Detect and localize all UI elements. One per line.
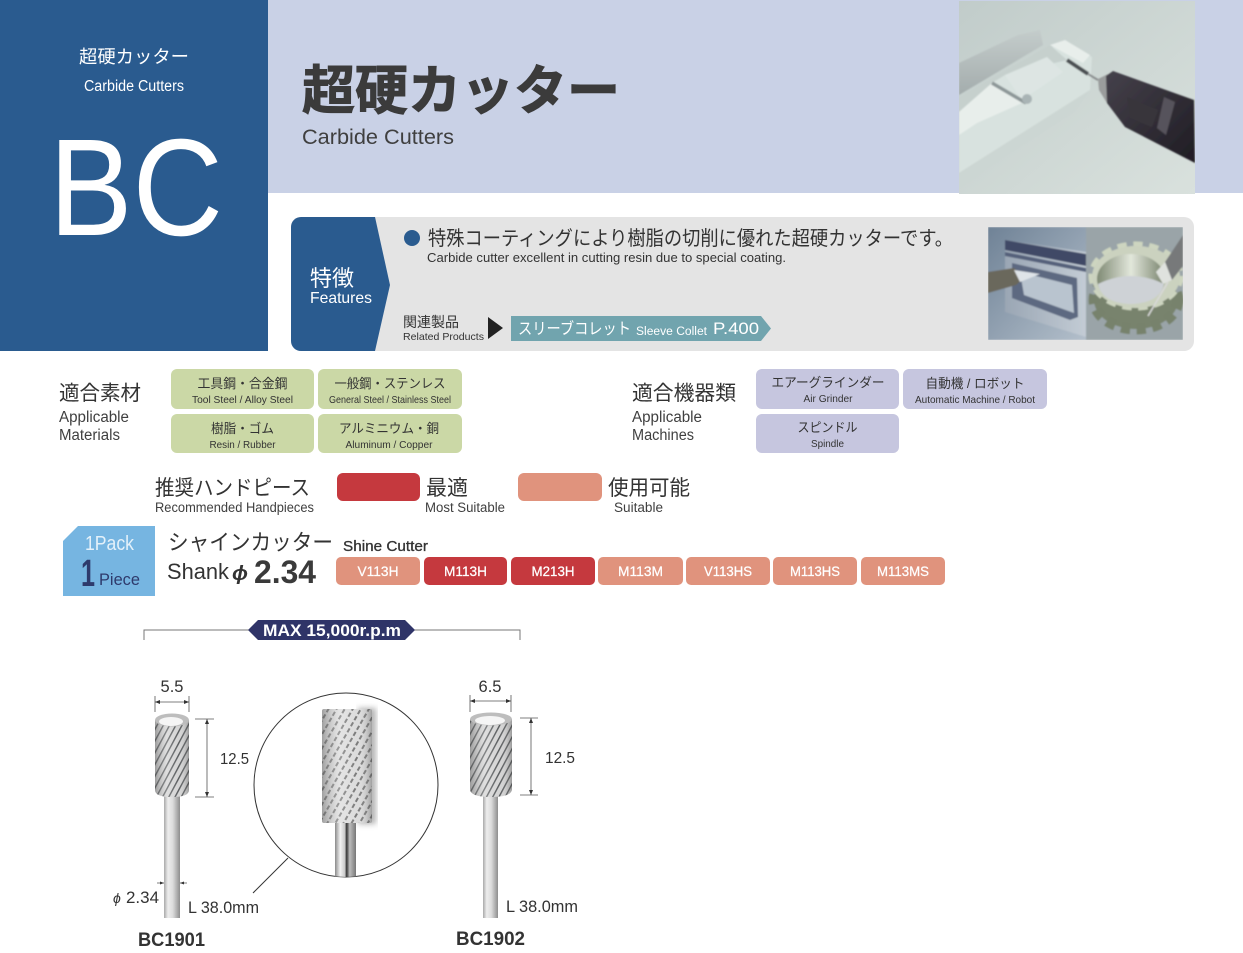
product line heading: Shank [167, 559, 230, 584]
pack badge: 1Pack [85, 533, 135, 555]
legend: suitable: 使用可能 [608, 477, 690, 500]
shank [483, 795, 498, 918]
photo: handpiece cutting acrylic [959, 1, 1195, 194]
related products label: Related Products [403, 331, 484, 343]
feature description [427, 227, 953, 265]
material: resin: 樹脂・ゴム [211, 421, 274, 436]
dimension: BC1901 total length: L 38.0mm [188, 898, 259, 917]
applicable machines heading: 適合機器類 [632, 382, 737, 405]
product line heading [167, 530, 428, 590]
applicable materials heading: Materials [59, 427, 120, 444]
recommended handpieces heading: 推奨ハンドピース [155, 477, 310, 500]
dimension: BC1901 width: 5.5 [161, 678, 183, 696]
bullet [404, 230, 420, 246]
arrow [488, 317, 503, 339]
related product tag [511, 316, 771, 341]
pack badge: 1 [81, 553, 95, 595]
left blue panel: BC category [0, 0, 268, 351]
related product tag: P.400 [713, 319, 759, 338]
dimension: BC1902 length [520, 718, 575, 795]
header band [268, 0, 1243, 193]
cutter head [470, 719, 512, 797]
dimension: BC1901 shank diameter [113, 882, 187, 907]
label: BC1902: BC1902 [456, 929, 525, 950]
applicable materials heading: Applicable [59, 409, 129, 426]
machine: spindle: スピンドル [798, 420, 858, 435]
dimension: BC1902 length: 12.5 [545, 750, 575, 767]
legend: suitable [518, 473, 690, 515]
main title [302, 62, 620, 149]
max speed bracket [144, 620, 520, 640]
material: general steel [318, 369, 462, 409]
handpiece tags: M113M [618, 563, 663, 579]
material: aluminum [318, 414, 462, 453]
product line heading: Shine Cutter [343, 539, 428, 555]
product line heading: ϕ [232, 563, 248, 585]
related products label: 関連製品 [403, 314, 459, 330]
material: resin [171, 414, 314, 453]
material: general steel: 一般鋼・ステンレス [334, 376, 446, 391]
category English name: Carbide Cutters [84, 78, 184, 95]
dimension: BC1901 length: 12.5 [220, 751, 249, 768]
product: BC1901 cutter [155, 714, 189, 918]
handpiece tags: M113HS [790, 563, 840, 579]
applicable machines heading: Applicable [632, 409, 702, 426]
machine: automatic machine: 自動機 / ロボット [926, 376, 1024, 391]
handpiece tags: M113H [444, 563, 487, 579]
feature description: 特殊コーティングにより樹脂の切削に優れた超硬カッターです。 [428, 227, 953, 250]
legend: most suitable: 最適 [426, 477, 468, 500]
cutter head [155, 720, 189, 797]
machine: spindle [756, 414, 899, 453]
features tab: Features [310, 290, 372, 307]
dimension: BC1902 width [470, 678, 511, 712]
label: BC1901: BC1901 [138, 930, 205, 951]
subtitle: Carbide Cutters [302, 125, 454, 149]
product line heading: シャインカッター [168, 530, 333, 555]
material: resin: Resin / Rubber [210, 439, 276, 451]
dimension: BC1901 shank diameter: ϕ [113, 890, 121, 906]
photo: machined parts and gear [988, 227, 1183, 340]
max speed bracket: MAX 15,000r.p.m [263, 621, 401, 640]
magnified view circle [253, 693, 438, 893]
material: general steel: General Steel / Stainless Steel [329, 394, 451, 406]
related product tag: スリーブコレット [518, 319, 631, 338]
recommended handpieces heading [155, 477, 314, 515]
applicable machines heading: Machines [632, 427, 694, 444]
material: aluminum: アルミニウム・銅 [339, 421, 439, 436]
material: aluminum: Aluminum / Copper [346, 439, 433, 451]
shank [164, 796, 180, 918]
product line heading: 2.34 [254, 554, 316, 590]
machine: air grinder: エアーグラインダー [772, 375, 884, 390]
machine: automatic machine: Automatic Machine / Robot [915, 394, 1035, 406]
features tab: 特徴 [310, 266, 354, 291]
machine: air grinder [756, 369, 899, 409]
machine: spindle: Spindle [811, 438, 844, 450]
feature description: Carbide cutter excellent in cutting resin due to special coating. [427, 251, 786, 265]
recommended handpieces heading: Recommended Handpieces [155, 500, 314, 515]
material: tool steel: Tool Steel / Alloy Steel [192, 394, 293, 406]
handpiece tags: M113MS [877, 563, 929, 579]
related products label [403, 314, 484, 343]
category Japanese name: 超硬カッター [79, 47, 189, 67]
applicable materials heading [59, 382, 141, 444]
dimension: BC1901 width [155, 678, 189, 712]
applicable materials heading: 適合素材 [59, 382, 141, 405]
dimension: BC1901 length [195, 719, 249, 797]
material: tool steel: 工具鋼・合金鋼 [198, 376, 288, 391]
category code: BC [49, 111, 223, 265]
panel: features [291, 217, 1194, 351]
pack badge: Piece [99, 570, 140, 589]
dimension: BC1902 total length: L 38.0mm [506, 897, 578, 916]
material: tool steel [171, 369, 314, 409]
legend: suitable: Suitable [614, 500, 663, 515]
legend: most suitable: Most Suitable [425, 500, 505, 515]
main title: 超硬カッター [302, 62, 620, 121]
handpiece tags: V113H [358, 563, 398, 579]
product: BC1902 cutter [470, 712, 512, 918]
features tab [291, 217, 390, 351]
related product tag: Sleeve Collet [636, 326, 708, 338]
machine: automatic machine [903, 369, 1047, 409]
handpiece tags: V113HS [704, 563, 752, 579]
pack badge [63, 526, 155, 596]
legend: most suitable [337, 473, 505, 515]
dimension: BC1901 shank diameter: 2.34 [126, 888, 159, 907]
dimension: BC1902 width: 6.5 [479, 678, 501, 696]
handpiece tags: M213H [532, 563, 574, 579]
machine: air grinder: Air Grinder [804, 393, 853, 405]
handpiece tags [336, 557, 945, 585]
applicable machines heading [632, 382, 737, 444]
